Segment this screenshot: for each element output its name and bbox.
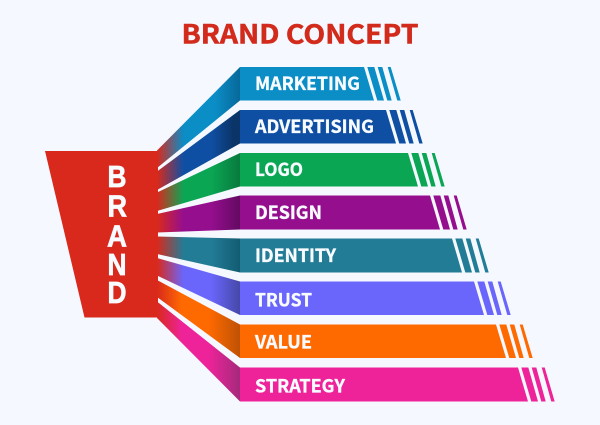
bar: identity [157,236,489,272]
brand vertical text: R [108,188,127,224]
bar: trust: TRUST [255,286,312,312]
brand vertical text: D [108,275,126,310]
bar: trust [157,258,511,315]
bar: design: DESIGN [255,199,322,225]
bar: value: VALUE [254,328,312,354]
bar: strategy: STRATEGY [255,372,346,398]
bar: marketing [157,67,401,168]
bar: marketing: MARKETING [255,70,360,96]
bar: advertising [157,110,423,190]
brand vertical text [107,159,127,310]
bar: design [157,196,467,232]
panel: brand block [45,151,158,318]
bar: identity: IDENTITY [255,242,337,268]
title: BRAND CONCEPT [182,14,418,51]
bar: logo: LOGO [255,156,303,182]
bar: strategy [157,302,555,402]
brand vertical text: B [108,159,126,194]
brand vertical text: A [107,218,127,254]
brand vertical text: N [108,247,126,282]
bar: advertising: ADVERTISING [254,113,374,139]
bar: value [157,280,533,358]
bar: logo [157,153,445,211]
